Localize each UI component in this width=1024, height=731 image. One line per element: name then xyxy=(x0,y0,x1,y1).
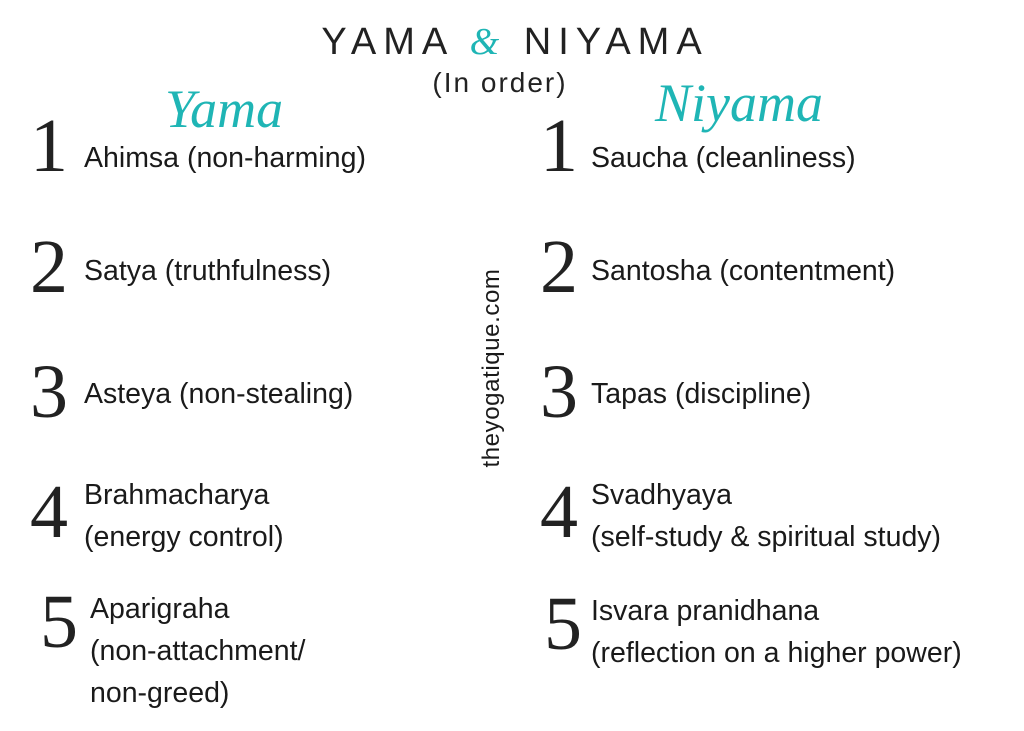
niyama 5: (reflection on a higher power) xyxy=(591,637,962,669)
yama 1: Ahimsa (non-harming) xyxy=(84,142,366,174)
yama 2: 2 xyxy=(30,225,68,309)
yama 4: (energy control) xyxy=(84,521,284,553)
niyama 1 xyxy=(540,104,856,188)
heading: Yama: Yama xyxy=(165,79,283,139)
yama 4: Brahmacharya xyxy=(84,479,269,511)
yama 3: Asteya (non-stealing) xyxy=(84,378,353,410)
yama 4: 4 xyxy=(30,470,68,554)
yama 2: Satya (truthfulness) xyxy=(84,255,331,287)
niyama 2 xyxy=(540,225,895,309)
niyama 3: Tapas (discipline) xyxy=(591,378,811,410)
yama 1 xyxy=(30,104,366,188)
niyama 3: 3 xyxy=(540,350,578,434)
niyama 2: Santosha (contentment) xyxy=(591,255,895,287)
yama 3: 3 xyxy=(30,350,68,434)
niyama 1: 1 xyxy=(540,104,578,188)
niyama 5: Isvara pranidhana xyxy=(591,595,819,627)
niyama 1: Saucha (cleanliness) xyxy=(591,142,856,174)
niyama 4: (self-study & spiritual study) xyxy=(591,521,941,553)
subtitle: (In order) xyxy=(432,67,568,98)
niyama 4 xyxy=(540,470,941,554)
yama 5: Aparigraha xyxy=(90,593,229,625)
niyama 4: Svadhyaya xyxy=(591,479,732,511)
yama 3 xyxy=(30,350,353,434)
yama 4 xyxy=(30,470,284,554)
yama 1: 1 xyxy=(30,104,68,188)
niyama 5: 5 xyxy=(544,582,582,666)
niyama 4: 4 xyxy=(540,470,578,554)
yama 5: non-greed) xyxy=(90,677,229,709)
niyama 2: 2 xyxy=(540,225,578,309)
yama 5 xyxy=(40,580,306,709)
title: YAMA & NIYAMA xyxy=(321,21,709,63)
panel: yama list xyxy=(30,104,366,709)
vertical watermark: theyogatique.com xyxy=(478,268,505,468)
yama 5: 5 xyxy=(40,580,78,664)
yama 2 xyxy=(30,225,331,309)
niyama 3 xyxy=(540,350,811,434)
niyama 5 xyxy=(544,582,962,669)
heading: Niyama: Niyama xyxy=(655,73,823,133)
panel: niyama list xyxy=(540,104,962,669)
yama 5: (non-attachment/ xyxy=(90,635,305,667)
